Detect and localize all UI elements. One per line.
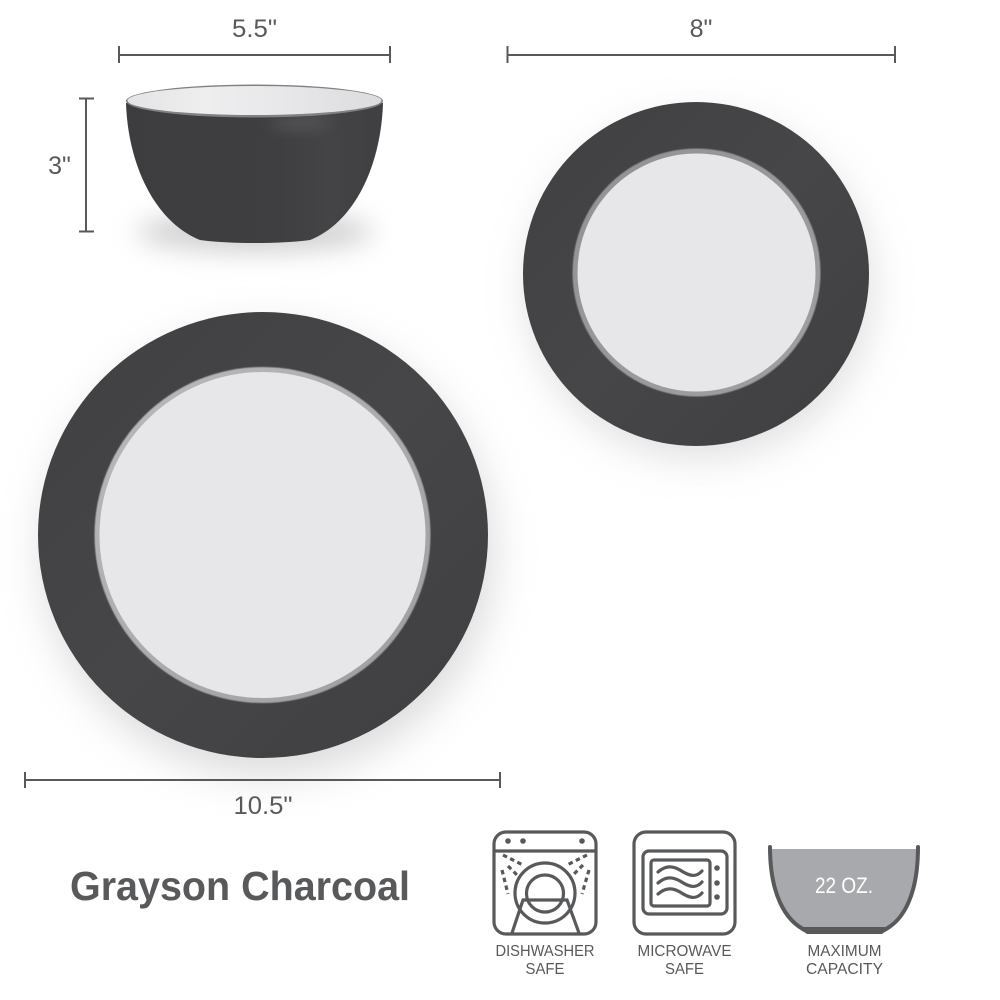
label: microwave safe: SAFE <box>665 961 704 978</box>
dimension: salad plate width 8 in <box>508 15 895 63</box>
salad plate <box>523 102 872 458</box>
title: Grayson Charcoal <box>70 863 410 909</box>
label: dishwasher safe <box>496 943 594 978</box>
label: microwave safe: MICROWAVE <box>638 943 732 960</box>
dimension: bowl width 5.5 in: 5.5" <box>232 15 277 43</box>
label: dishwasher safe: DISHWASHER <box>496 943 594 960</box>
dinner plate <box>38 312 494 776</box>
icon: dishwasher safe <box>494 832 596 934</box>
dimension: dinner plate width 10.5 in <box>25 772 500 820</box>
label: maximum capacity: CAPACITY <box>806 961 883 978</box>
dimension: bowl height 3 in <box>48 98 94 232</box>
dimension: dinner plate width 10.5 in: 10.5" <box>234 792 292 820</box>
dimension: bowl height 3 in: 3" <box>48 152 71 180</box>
dimension: salad plate width 8 in: 8" <box>690 15 712 43</box>
icon: maximum capacity bowl <box>770 847 918 934</box>
dimension: bowl width 5.5 in <box>119 15 390 63</box>
icon: microwave safe <box>634 832 735 934</box>
icon: maximum capacity bowl: 22 OZ. <box>815 873 873 898</box>
label: maximum capacity: MAXIMUM <box>808 943 882 960</box>
bowl <box>126 84 383 252</box>
label: maximum capacity <box>806 943 883 978</box>
label: microwave safe <box>638 943 732 978</box>
label: dishwasher safe: SAFE <box>526 961 564 978</box>
